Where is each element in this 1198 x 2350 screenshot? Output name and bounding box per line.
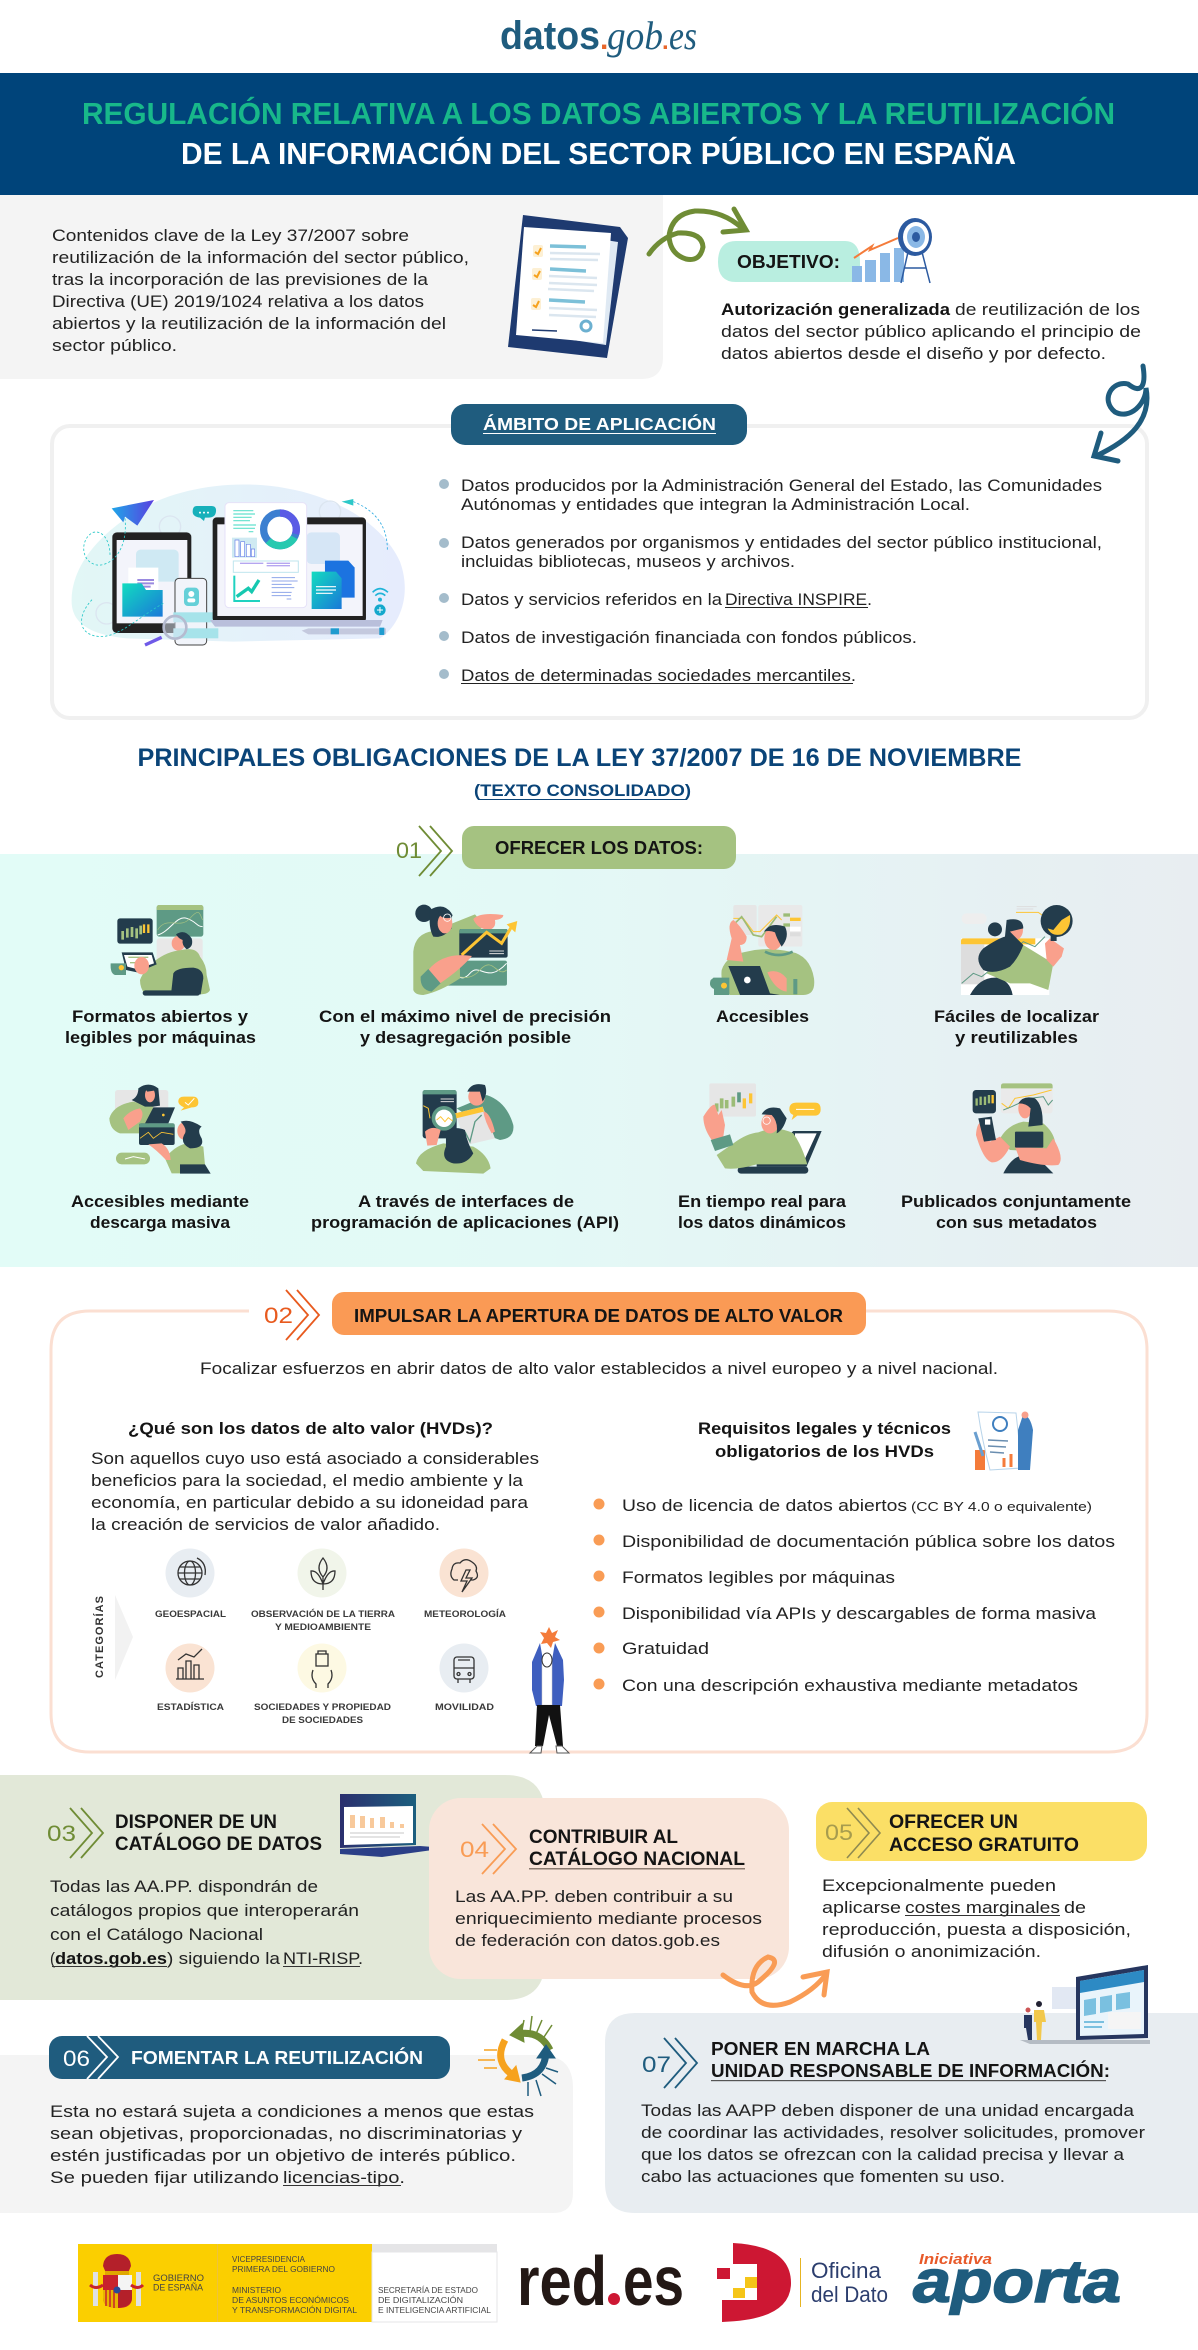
body 03: ) siguiendo la bbox=[167, 1950, 281, 1968]
objective text: de reutilización de los bbox=[955, 301, 1140, 319]
footer logo: red.es bbox=[517, 2242, 684, 2320]
footer logo: Gobierno de España bbox=[78, 2244, 497, 2322]
heading 04: CATÁLOGO NACIONAL bbox=[529, 1848, 745, 1870]
requirements list: Gratuidad bbox=[622, 1640, 709, 1658]
icon: woman with chart arrow bbox=[413, 905, 517, 995]
label bbox=[65, 1008, 256, 1047]
illustration: devices bbox=[72, 484, 405, 645]
requirements list bbox=[594, 1497, 1115, 1695]
what are HVDs: economía, en particular debido a su idoneidad para bbox=[91, 1494, 529, 1512]
footer logo: Oficina del Dato: del Dato bbox=[811, 2282, 888, 2307]
what are HVDs: Son aquellos cuyo uso está asociado a considerables bbox=[91, 1450, 539, 1468]
icon: reuse cycle bbox=[478, 2016, 558, 2096]
requirements list: Disponibilidad de documentación pública sobre los datos bbox=[622, 1533, 1115, 1551]
icon: clipboard bbox=[508, 215, 628, 358]
label: con sus metadatos bbox=[936, 1214, 1097, 1232]
body 04 bbox=[455, 1888, 762, 1950]
categories label: CATEGORÍAS bbox=[93, 1596, 106, 1678]
bullet list: ámbito: incluidas bibliotecas, museos y archivos. bbox=[461, 553, 795, 571]
body 03: ( bbox=[50, 1950, 55, 1968]
heading 07 bbox=[711, 2038, 1110, 2081]
step 01 number and chevrons bbox=[396, 826, 452, 876]
label: Publicados conjuntamente bbox=[901, 1193, 1131, 1211]
intro text: sector público. bbox=[52, 337, 177, 355]
requirements list: Disponibilidad vía APIs y descargables de forma masiva bbox=[622, 1605, 1097, 1623]
body 06: sean objetivas, proporcionadas, no discriminatorias y bbox=[50, 2125, 523, 2143]
coat of arms bbox=[90, 2254, 143, 2308]
heading pill: ámbito bbox=[451, 404, 747, 445]
category: observación de la tierra bbox=[251, 1548, 395, 1633]
body 03: catálogos propios que interoperarán bbox=[50, 1902, 359, 1920]
category: meteorología bbox=[424, 1548, 506, 1620]
objective text: datos del sector público aplicando el principio de bbox=[721, 323, 1141, 341]
body 05: difusión o anonimización. bbox=[822, 1943, 1041, 1961]
heading 03: CATÁLOGO DE DATOS bbox=[115, 1833, 322, 1855]
panel: 01 ofrecer los datos bbox=[0, 826, 1198, 1267]
intro text: reutilización de la información del sector público, bbox=[52, 249, 469, 267]
figure: person holding star bbox=[530, 1627, 569, 1753]
bullet list: ámbito: Directiva INSPIRE. bbox=[725, 591, 872, 609]
icon: woman with magnifier bbox=[961, 905, 1073, 995]
footer logo: Gobierno de España: PRIMERA DEL GOBIERNO bbox=[232, 2264, 335, 2274]
intro text: tras la incorporación de las previsiones de la bbox=[52, 271, 429, 289]
category: movilidad: MOVILIDAD bbox=[435, 1702, 494, 1713]
icon: man emerging from laptop bbox=[703, 1083, 822, 1174]
icon: screen with people bbox=[1020, 1965, 1150, 2044]
icon: person with tablet bbox=[111, 905, 210, 996]
label bbox=[901, 1193, 1131, 1232]
panel: 03 catálogo de datos bbox=[0, 1775, 545, 2000]
heading pill 05: 05 bbox=[825, 1820, 853, 1845]
footer logo: Gobierno de España: MINISTERIO bbox=[232, 2285, 281, 2295]
icon: man with laptop bbox=[710, 905, 814, 995]
heading 04: CONTRIBUIR AL bbox=[529, 1827, 678, 1848]
label: los datos dinámicos bbox=[678, 1214, 846, 1232]
logo: datos.gob.es: datos bbox=[500, 14, 600, 58]
footer logo: Iniciativa aporta: Iniciativa bbox=[919, 2251, 992, 2268]
step 07 number and chevrons bbox=[642, 2038, 697, 2088]
icon: two women with laptop bbox=[109, 1085, 211, 1174]
footer logo: Oficina del Dato: Oficina bbox=[811, 2258, 882, 2283]
bullet list: ámbito: Datos producidos por la Administración General del Estado, las Comunidades bbox=[461, 477, 1102, 495]
body 06 bbox=[50, 2103, 534, 2187]
step 03 number and chevrons: 03 bbox=[47, 1821, 76, 1846]
body 04: Las AA.PP. deben contribuir a su bbox=[455, 1888, 733, 1906]
body 06: licencias-tipo. bbox=[283, 2169, 405, 2187]
panel: 07 unidad responsable bbox=[605, 1965, 1198, 2213]
requirements heading bbox=[698, 1420, 951, 1461]
label: Fáciles de localizar bbox=[934, 1008, 1100, 1026]
bullet list: ámbito: Datos generados por organismos y entidades del sector público institucional, bbox=[461, 534, 1102, 552]
categories label bbox=[93, 1595, 133, 1680]
main heading: obligaciones: PRINCIPALES OBLIGACIONES DE LA LEY 37/2007 DE 16 DE NOVIEMBRE bbox=[138, 744, 1022, 772]
intro text: Contenidos clave de la Ley 37/2007 sobre bbox=[52, 227, 409, 245]
category: geoespacial bbox=[155, 1548, 226, 1620]
heading 04 bbox=[529, 1827, 745, 1870]
logo: datos.gob.es: es bbox=[669, 13, 697, 58]
logo: datos.gob.es: . bbox=[662, 28, 669, 55]
label: Con el máximo nivel de precisión bbox=[319, 1008, 611, 1026]
panel: 02 datos de alto valor bbox=[51, 1290, 1147, 1753]
bullet list: ámbito: Datos de determinadas sociedades mercantiles. bbox=[461, 667, 856, 685]
label: legibles por máquinas bbox=[65, 1029, 256, 1047]
requirements heading: Requisitos legales y técnicos bbox=[698, 1420, 951, 1438]
category: sociedades: SOCIEDADES Y PROPIEDAD bbox=[254, 1702, 391, 1713]
icon: laptop bbox=[340, 1794, 447, 1857]
panel: intro bbox=[0, 195, 663, 379]
body 05: reproducción, puesta a disposición, bbox=[822, 1921, 1131, 1939]
intro sentence: Focalizar esfuerzos en abrir datos de alto valor establecidos a nivel europeo y a nivel nacional. bbox=[200, 1360, 998, 1378]
what are HVDs: beneficios para la sociedad, el medio ambiente y la bbox=[91, 1472, 524, 1490]
panel: 04 catálogo nacional bbox=[429, 1798, 789, 1979]
body 06: estén justificadas por un objetivo de interés público. bbox=[50, 2147, 516, 2165]
category: movilidad bbox=[435, 1644, 494, 1713]
label bbox=[71, 1193, 249, 1232]
body 04: de federación con datos.gob.es bbox=[455, 1932, 720, 1950]
body 07 bbox=[641, 2102, 1146, 2186]
logo: datos.gob.es bbox=[500, 13, 697, 58]
step 02 number and chevrons bbox=[264, 1290, 319, 1340]
footer logo: Oficina del Dato bbox=[717, 2243, 888, 2322]
label: descarga masiva bbox=[90, 1214, 231, 1232]
body 03: datos.gob.es bbox=[55, 1950, 167, 1968]
category: sociedades bbox=[254, 1644, 391, 1726]
label: Formatos abiertos y bbox=[72, 1008, 249, 1026]
bullet list: ámbito bbox=[439, 477, 1102, 685]
body 07: cabo las actuaciones que fomenten su uso. bbox=[641, 2168, 1005, 2186]
body 03: Todas las AA.PP. dispondrán de bbox=[50, 1878, 318, 1896]
heading pill 06: FOMENTAR LA REUTILIZACIÓN bbox=[131, 2047, 423, 2068]
category: observación de la tierra: OBSERVACIÓN DE LA TIERRA bbox=[251, 1608, 395, 1620]
footer logo: red.es: red bbox=[517, 2242, 607, 2320]
label: A través de interfaces de bbox=[358, 1193, 574, 1211]
label bbox=[934, 1008, 1100, 1047]
icon: woman with phone and tablet bbox=[973, 1083, 1061, 1173]
what are HVDs: ¿Qué son los datos de alto valor (HVDs)? bbox=[128, 1420, 493, 1438]
body 05: aplicarse bbox=[822, 1899, 901, 1917]
bullet list: ámbito: Datos de investigación financiada con fondos públicos. bbox=[461, 629, 917, 647]
intro text bbox=[52, 227, 469, 355]
footer logo: Gobierno de España: VICEPRESIDENCIA bbox=[232, 2254, 305, 2264]
heading 07: UNIDAD RESPONSABLE DE INFORMACIÓN: bbox=[711, 2060, 1110, 2081]
arrow: orange swirl bbox=[723, 1957, 827, 2005]
footer logo: Gobierno de España: E INTELIGENCIA ARTIFICIAL bbox=[378, 2305, 491, 2315]
body 07: de coordinar las actividades, resolver solicitudes, promover bbox=[641, 2124, 1146, 2142]
label: y desagregación posible bbox=[360, 1029, 571, 1047]
heading pill: ámbito: ÁMBITO DE APLICACIÓN bbox=[483, 413, 716, 434]
label bbox=[319, 1008, 611, 1047]
label: Accesibles bbox=[716, 1008, 809, 1026]
objective text: datos abiertos desde el diseño y por defecto. bbox=[721, 345, 1106, 363]
body 07: Todas las AAPP deben disponer de una unidad encargada bbox=[641, 2102, 1135, 2120]
step 04 number and chevrons: 04 bbox=[460, 1837, 489, 1862]
footer logo: Gobierno de España: DE ESPAÑA bbox=[153, 2282, 204, 2294]
heading 07: PONER EN MARCHA LA bbox=[711, 2038, 930, 2059]
step 02 number and chevrons: 02 bbox=[264, 1303, 293, 1328]
footer logo: red.es: es bbox=[623, 2242, 684, 2320]
icon: people with api window bbox=[416, 1084, 513, 1174]
footer logo: Gobierno de España: DE DIGITALIZACIÓN bbox=[378, 2295, 463, 2305]
main heading: obligaciones bbox=[138, 744, 1022, 800]
category: estadística bbox=[157, 1644, 224, 1713]
footer logo: Gobierno de España: SECRETARÍA DE ESTADO bbox=[378, 2285, 478, 2295]
arrow: blue swirl bbox=[1094, 366, 1147, 461]
requirements list: (CC BY 4.0 o equivalente) bbox=[911, 1499, 1092, 1514]
label: y reutilizables bbox=[955, 1029, 1078, 1047]
objective pill: OBJETIVO: bbox=[737, 252, 840, 272]
body 05: costes marginales bbox=[905, 1899, 1060, 1917]
requirements list: Uso de licencia de datos abiertos bbox=[622, 1497, 907, 1515]
heading 03: DISPONER DE UN bbox=[115, 1812, 277, 1833]
body 05: de bbox=[1064, 1899, 1086, 1917]
logo: datos.gob.es: . bbox=[600, 23, 608, 56]
intro text: Directiva (UE) 2019/1024 relativa a los datos bbox=[52, 293, 424, 311]
heading pill 02: IMPULSAR LA APERTURA DE DATOS DE ALTO VALOR bbox=[354, 1306, 843, 1326]
objective text: Autorización generalizada bbox=[721, 301, 951, 319]
label: Accesibles mediante bbox=[71, 1193, 249, 1211]
category: observación de la tierra: Y MEDIOAMBIENTE bbox=[275, 1622, 371, 1633]
category: estadística: ESTADÍSTICA bbox=[157, 1702, 224, 1713]
category: geoespacial: GEOESPACIAL bbox=[155, 1609, 226, 1620]
step 04 number and chevrons bbox=[460, 1824, 516, 1874]
arrow: green swirl bbox=[649, 209, 746, 260]
heading 03 bbox=[115, 1812, 322, 1855]
requirements list: Formatos legibles por máquinas bbox=[622, 1569, 895, 1587]
heading pill 05 bbox=[816, 1802, 1147, 1861]
body 07: que los datos se ofrezcan con la calidad precisa y llevar a bbox=[641, 2146, 1125, 2164]
label: programación de aplicaciones (API) bbox=[311, 1214, 619, 1232]
heading pill 02 bbox=[332, 1292, 866, 1335]
panel: ámbito de aplicación bbox=[52, 404, 1147, 718]
body 05 bbox=[822, 1877, 1131, 1961]
icon: legal documents bbox=[975, 1412, 1033, 1470]
what are HVDs: la creación de servicios de valor añadido. bbox=[91, 1516, 440, 1534]
panel: 06 fomentar la reutilización bbox=[0, 2016, 573, 2213]
footer logo: Gobierno de España: GOBIERNO bbox=[153, 2273, 204, 2284]
step 03 number and chevrons bbox=[47, 1808, 103, 1858]
logo: datos.gob.es: gob bbox=[607, 13, 663, 58]
footer logo: Iniciativa aporta: aporta bbox=[913, 2248, 1121, 2315]
body 04: enriquecimiento mediante procesos bbox=[455, 1910, 762, 1928]
title banner: DE LA INFORMACIÓN DEL SECTOR PÚBLICO EN ESPAÑA bbox=[181, 135, 1016, 171]
footer logo: Gobierno de España: DE ASUNTOS ECONÓMICOS bbox=[232, 2295, 349, 2305]
body 06: Esta no estará sujeta a condiciones a menos que estas bbox=[50, 2103, 534, 2121]
heading pill 01: OFRECER LOS DATOS: bbox=[495, 838, 703, 858]
requirements list: Con una descripción exhaustiva mediante metadatos bbox=[622, 1677, 1078, 1695]
heading pill 06 bbox=[49, 2036, 450, 2079]
body 06: Se pueden fijar utilizando bbox=[50, 2169, 279, 2187]
panel: 05 acceso gratuito bbox=[816, 1802, 1147, 1961]
title banner bbox=[0, 73, 1198, 195]
body 03: con el Catálogo Nacional bbox=[50, 1926, 263, 1944]
heading pill 05: OFRECER UN bbox=[889, 1812, 1018, 1833]
objective text bbox=[721, 301, 1141, 363]
label: En tiempo real para bbox=[678, 1193, 847, 1211]
step 07 number and chevrons: 07 bbox=[642, 2052, 671, 2077]
body 03: NTI-RISP. bbox=[283, 1950, 363, 1968]
heading pill 06: 06 bbox=[63, 2046, 90, 2071]
footer logo: Gobierno de España: Y TRANSFORMACIÓN DIGITAL bbox=[232, 2305, 357, 2315]
what are HVDs bbox=[91, 1420, 539, 1534]
category: meteorología: METEOROLOGÍA bbox=[424, 1609, 506, 1620]
requirements heading: obligatorios de los HVDs bbox=[715, 1443, 934, 1461]
bullet list: ámbito: Datos y servicios referidos en la bbox=[461, 591, 723, 609]
bullet list: ámbito: Autónomas y entidades que integran la Administración Local. bbox=[461, 496, 970, 514]
title banner: REGULACIÓN RELATIVA A LOS DATOS ABIERTOS Y LA REUTILIZACIÓN bbox=[82, 95, 1115, 131]
heading pill 05: ACCESO GRATUITO bbox=[889, 1835, 1079, 1856]
label bbox=[678, 1193, 847, 1232]
icon: target and bars bbox=[852, 218, 932, 283]
objective pill bbox=[718, 241, 860, 282]
intro text: abiertos y la reutilización de la información del bbox=[52, 315, 446, 333]
body 03 bbox=[50, 1878, 363, 1968]
body 05: Excepcionalmente pueden bbox=[822, 1877, 1056, 1895]
category: sociedades: DE SOCIEDADES bbox=[282, 1715, 363, 1726]
label bbox=[311, 1193, 619, 1232]
heading pill 01 bbox=[462, 826, 736, 869]
main heading: obligaciones: (TEXTO CONSOLIDADO) bbox=[474, 781, 691, 800]
step 01 number and chevrons: 01 bbox=[396, 838, 422, 863]
